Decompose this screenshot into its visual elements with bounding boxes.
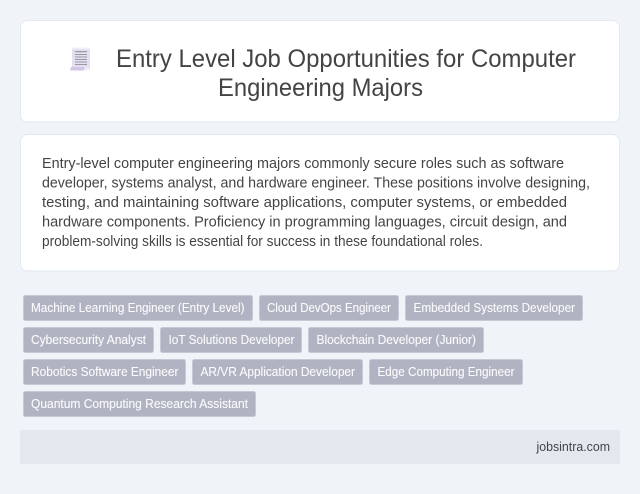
text block: description: testing, and maintaining software applications, computer systems, or embedded (42, 195, 567, 211)
text block: description: developer, systems analyst, and hardware engineer. These positions involve designing, (42, 176, 590, 192)
tag: Robotics Software Engineer (31, 365, 178, 379)
tag: AR/VR Application Developer (200, 365, 355, 379)
tag: Cloud DevOps Engineer (267, 301, 391, 315)
title: Engineering Majors (218, 74, 423, 102)
tag (370, 360, 522, 384)
text block: description (42, 156, 590, 250)
tag (24, 360, 186, 384)
tag (24, 296, 252, 320)
text block: description: hardware components. Proficiency in programming languages, circuit design, and (42, 214, 567, 230)
title: Entry Level Job Opportunities for Computer (116, 45, 576, 73)
tag (192, 360, 362, 384)
tag (308, 328, 484, 352)
panel: description (20, 134, 620, 271)
text block: description: problem-solving skills is essential for success in these foundational roles. (42, 234, 483, 250)
tag list (24, 296, 582, 416)
tag: Blockchain Developer (Junior) (316, 333, 476, 347)
tag (160, 328, 302, 352)
tag (24, 392, 256, 416)
panel: header (20, 20, 620, 122)
tag: Edge Computing Engineer (378, 365, 514, 379)
source credit: jobsintra.com (536, 440, 610, 454)
footer (20, 430, 620, 464)
tag (260, 296, 398, 320)
tag: Machine Learning Engineer (Entry Level) (31, 301, 244, 315)
tag (406, 296, 582, 320)
tag: Cybersecurity Analyst (31, 333, 146, 347)
tag: Embedded Systems Developer (414, 301, 575, 315)
tag: IoT Solutions Developer (168, 333, 294, 347)
tag (24, 328, 154, 352)
icon: document scroll (70, 48, 90, 70)
text block: description: Entry-level computer engineering majors commonly secure roles such as software (42, 156, 564, 172)
title (116, 45, 576, 102)
tag: Quantum Computing Research Assistant (31, 397, 248, 411)
